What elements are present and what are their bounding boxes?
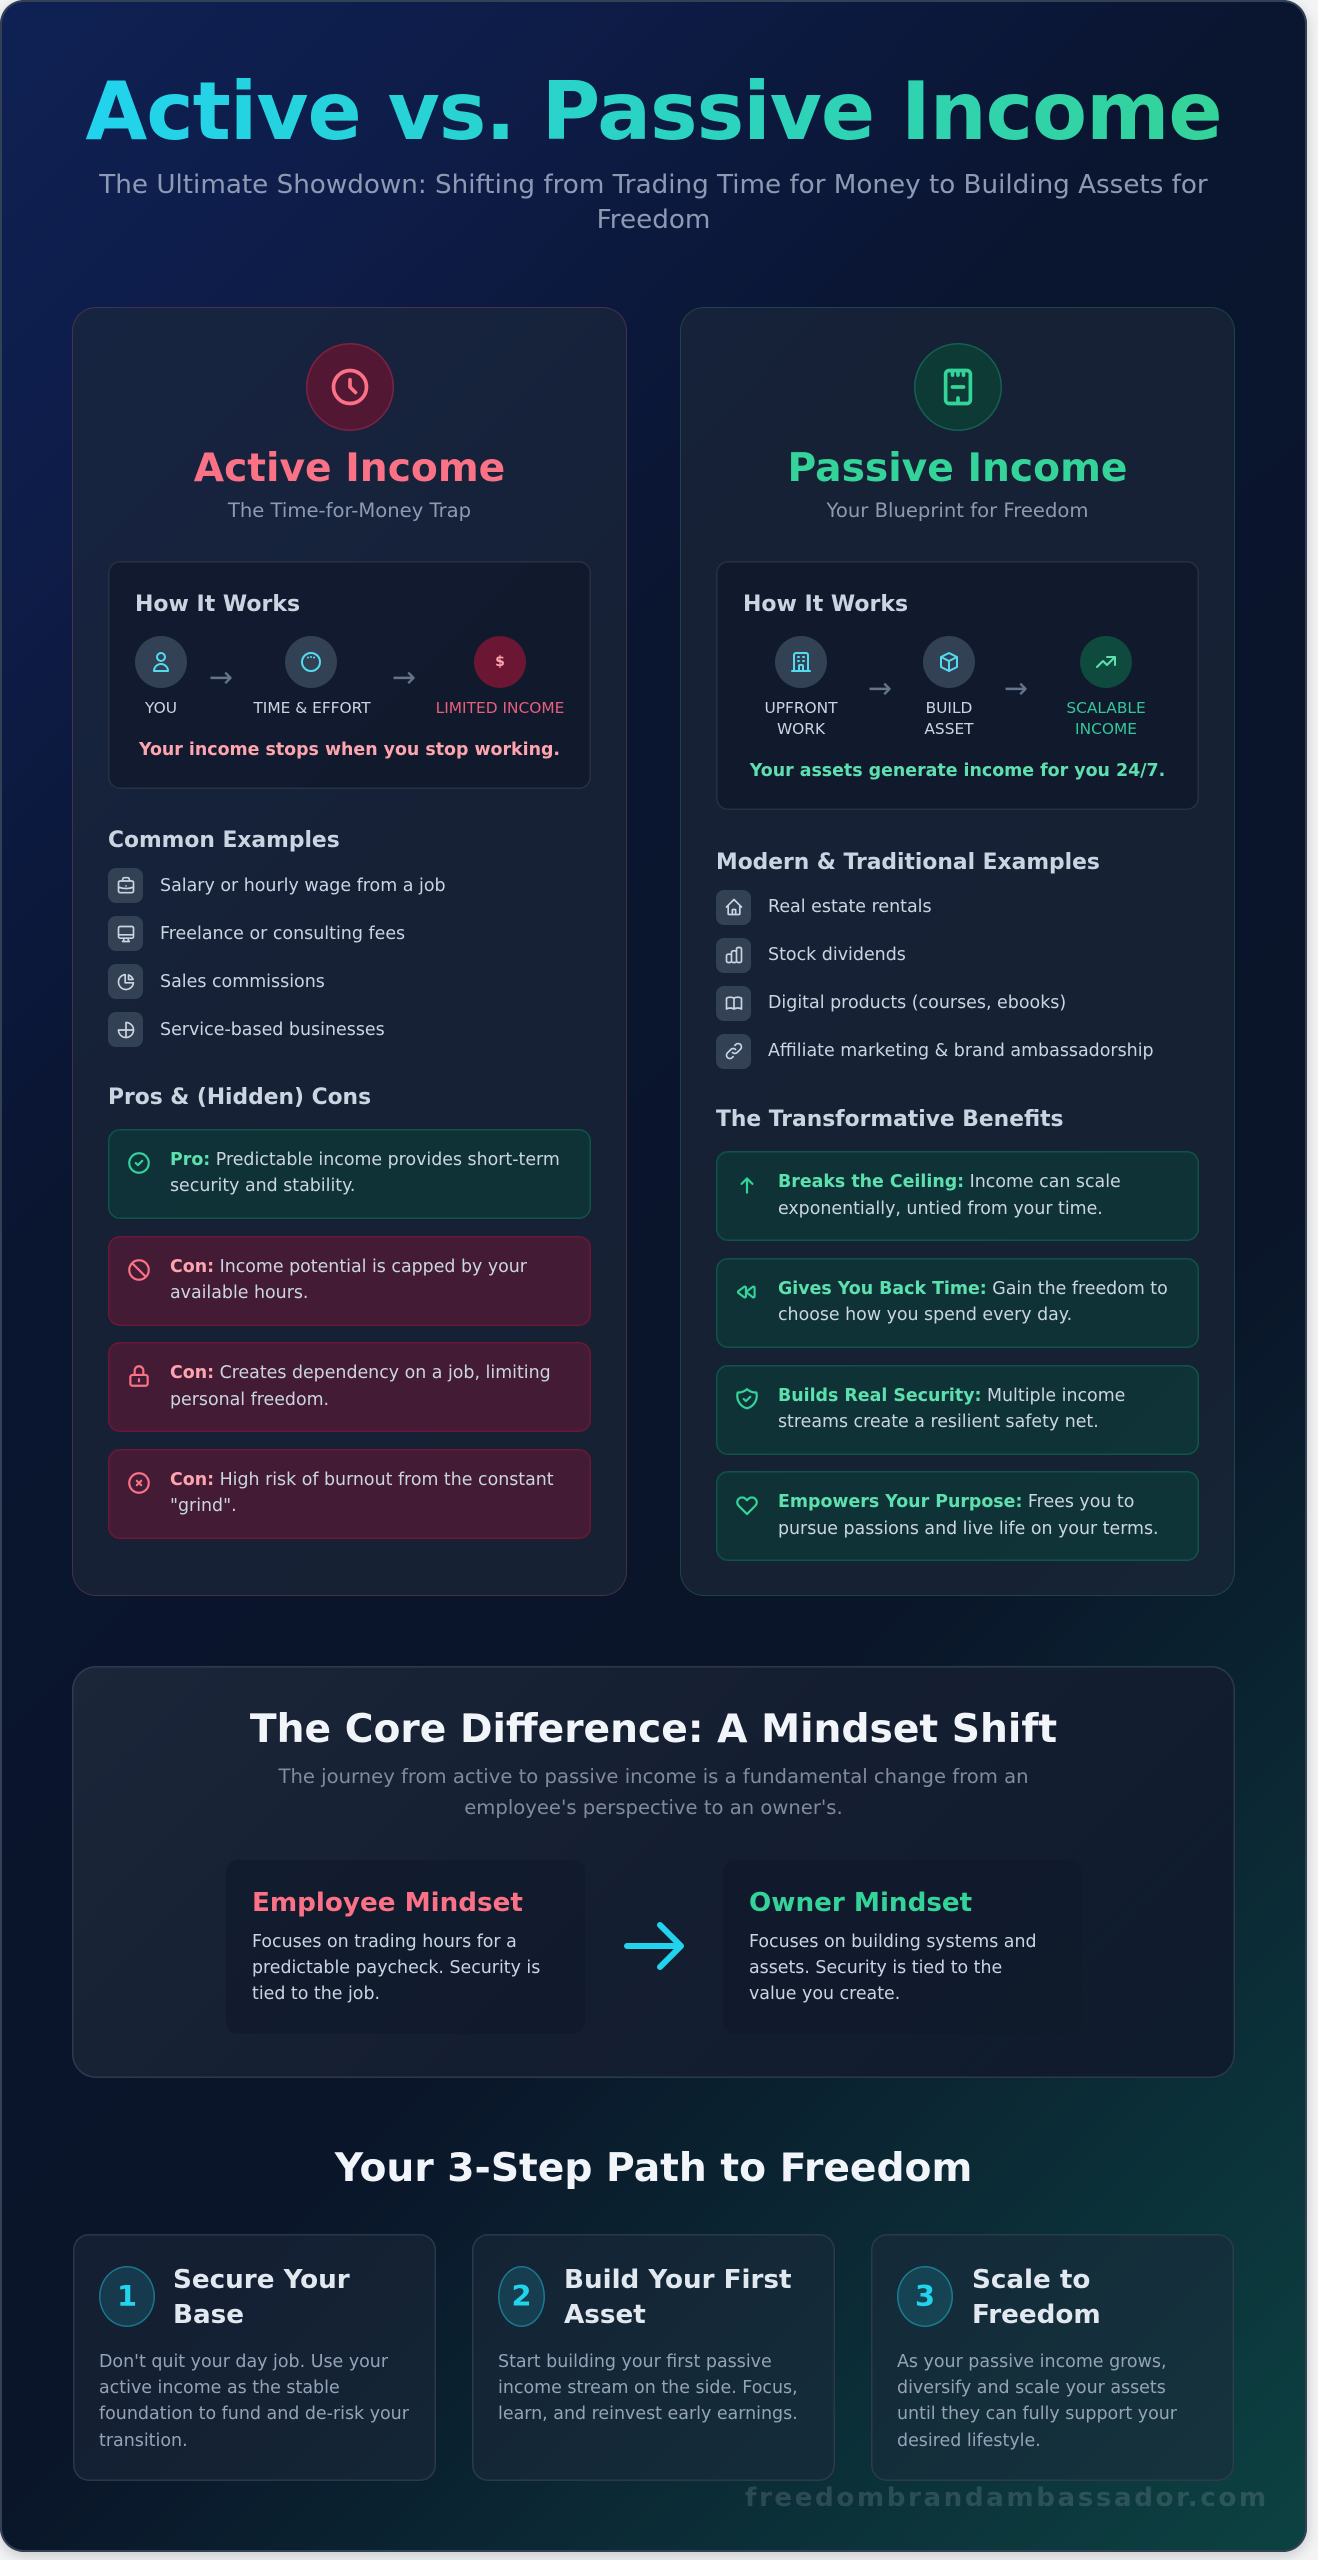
step card 2: Asset [564, 2300, 646, 2330]
step card 3: Freedom [972, 2300, 1101, 2330]
pro: predictable [108, 1129, 591, 1219]
label: scalable income [1066, 698, 1146, 738]
mindset description [278, 1765, 1028, 1819]
icon: clock [306, 343, 394, 431]
step card 3 [871, 2234, 1234, 2481]
step card 1: Don't quit your day job. Use your [99, 2352, 388, 2372]
benefit: ceiling: Breaks the Ceiling: Income can scale [778, 1172, 1121, 1192]
benefit: time: choose how you spend every day. [778, 1305, 1072, 1325]
label: time and effort: TIME & EFFORT [253, 698, 371, 716]
example: service business: Service-based businesses [160, 1020, 385, 1040]
subtitle: The Ultimate Showdown: Shifting from Trading Time for Money to Building Assets for [99, 170, 1208, 200]
takeaway: Your assets generate income for you 24/7. [750, 760, 1165, 780]
example: dividends: Stock dividends [768, 945, 906, 965]
step card 1: Base [173, 2300, 244, 2330]
label: upfront work [764, 698, 838, 738]
step: limited income: $ [495, 654, 505, 670]
mindset description: The journey from active to passive income is a fundamental change from an [278, 1765, 1028, 1788]
benefit: ceiling: exponentially, untied from your time. [778, 1199, 1103, 1219]
how it works heading: How It Works [743, 592, 908, 616]
step card 2: learn, and reinvest early earnings. [498, 2404, 798, 2424]
step: upfront work [775, 636, 827, 688]
step card 3: desired lifestyle. [897, 2431, 1041, 2451]
label: build asset: ASSET [924, 720, 974, 738]
how it works heading: How It Works [135, 592, 300, 616]
benefit: time: Gives You Back Time: Gain the freedom to [778, 1279, 1168, 1299]
employee mindset box: tied to the job. [252, 1984, 380, 2004]
passive income heading: Passive Income [787, 446, 1128, 491]
example: affiliate marketing [716, 1034, 1154, 1069]
con: burnout: "grind". [170, 1496, 237, 1516]
con: dependency: Con: Creates dependency on a job, limiting [170, 1363, 551, 1383]
arrow: shift [624, 1922, 684, 1970]
example: commissions: Sales commissions [160, 972, 325, 992]
owner mindset box: Owner Mindset [749, 1888, 972, 1918]
panel: active income [72, 307, 627, 1596]
mindset heading: The Core Difference: A Mindset Shift [250, 1707, 1057, 1752]
step card 1: active income as the stable [99, 2378, 340, 2398]
panel: passive income [680, 307, 1235, 1596]
active income heading: Active Income [194, 446, 505, 491]
label: limited income: LIMITED INCOME [436, 698, 564, 716]
benefit: purpose: Empowers Your Purpose: Frees you to [778, 1492, 1134, 1512]
example: service business [108, 1012, 385, 1047]
benefit: purpose [716, 1471, 1199, 1561]
step card 2: Build Your First [564, 2264, 792, 2294]
title: Active vs. Passive Income [85, 65, 1222, 158]
owner mindset box: Focuses on building systems and [749, 1932, 1037, 1952]
employee mindset box: predictable paycheck. Security is [252, 1958, 540, 1978]
employee mindset box: Focuses on trading hours for a [252, 1932, 517, 1952]
arrow: → [392, 660, 416, 694]
step card 3: until they can fully support your [897, 2404, 1177, 2424]
benefits heading: The Transformative Benefits [716, 1107, 1064, 1132]
con: capped: Con: Income potential is capped by your [170, 1257, 527, 1277]
owner mindset box [723, 1860, 1082, 2034]
example: real estate: Real estate rentals [768, 897, 932, 917]
active income tagline: The Time-for-Money Trap [228, 498, 471, 522]
example: real estate [716, 890, 932, 925]
subtitle [99, 170, 1208, 235]
arrow: → [868, 671, 892, 705]
step card 2 [472, 2234, 835, 2481]
label: upfront work: WORK [777, 720, 825, 738]
subtitle: Freedom [597, 205, 710, 235]
step card 2: 2 [511, 2279, 532, 2313]
benefit: time [716, 1258, 1199, 1348]
step card 3: 3 [915, 2279, 935, 2313]
employee mindset box: Employee Mindset [252, 1888, 523, 1918]
con: dependency: personal freedom. [170, 1390, 329, 1410]
example: salary: Salary or hourly wage from a job [160, 876, 446, 896]
label: upfront work: UPFRONT [764, 698, 838, 716]
benefit: purpose: pursue passions and live life on your terms. [778, 1519, 1159, 1539]
benefit: security [716, 1365, 1199, 1455]
pros and cons heading: Pros & (Hidden) Cons [108, 1084, 371, 1110]
example: freelance: Freelance or consulting fees [160, 924, 405, 944]
example: commissions [108, 964, 325, 999]
step card 1: transition. [99, 2431, 188, 2451]
benefit: ceiling [716, 1151, 1199, 1241]
watermark: freedombrandambassador.com [745, 2483, 1269, 2513]
con: burnout [108, 1449, 591, 1539]
icon: asset [914, 343, 1002, 431]
example: freelance [108, 916, 405, 951]
passive income tagline: Your Blueprint for Freedom [827, 498, 1088, 522]
example: salary [108, 868, 446, 903]
mindset description: employee's perspective to an owner's. [464, 1796, 843, 1819]
modern and traditional examples heading: Modern & Traditional Examples [716, 850, 1100, 875]
step card 1: 1 [117, 2279, 137, 2313]
step card 1: foundation to fund and de-risk your [99, 2404, 409, 2424]
arrow: → [1004, 671, 1028, 705]
con: capped: available hours. [170, 1283, 308, 1303]
label: build asset: BUILD [926, 698, 972, 716]
con: dependency [108, 1342, 591, 1432]
step: time and effort [285, 636, 337, 688]
example: dividends [716, 938, 906, 973]
example: affiliate marketing: Affiliate marketing & brand ambassadorship [768, 1041, 1154, 1061]
owner mindset box: assets. Security is tied to the [749, 1958, 1002, 1978]
pro: predictable: security and stability. [170, 1176, 355, 1196]
label: you: YOU [145, 698, 177, 716]
step: scalable income [1080, 636, 1132, 688]
step card 2: Start building your first passive [498, 2352, 772, 2372]
step card 1 [73, 2234, 436, 2481]
steps heading: Your 3-Step Path to Freedom [335, 2146, 972, 2190]
benefit: security: streams create a resilient safety net. [778, 1412, 1099, 1432]
label: scalable income: INCOME [1075, 720, 1137, 738]
pro: predictable: Pro: Predictable income provides short-term [170, 1150, 560, 1170]
step card 1: Secure Your [173, 2264, 350, 2294]
panel: mindset shift [72, 1666, 1235, 2078]
example: digital products: Digital products (courses, ebooks) [768, 993, 1066, 1013]
label: build asset [924, 698, 974, 738]
step card 3: Scale to [972, 2264, 1090, 2294]
step: build asset [923, 636, 975, 688]
employee mindset box [226, 1860, 585, 2034]
common examples heading: Common Examples [108, 828, 340, 852]
step card 3: diversify and scale your assets [897, 2378, 1166, 2398]
con: capped [108, 1236, 591, 1326]
step card 2: income stream on the side. Focus, [498, 2378, 798, 2398]
label: scalable income: SCALABLE [1066, 698, 1146, 716]
benefit: security: Builds Real Security: Multiple income [778, 1386, 1125, 1406]
arrow: → [209, 660, 233, 694]
step card 3: As your passive income grows, [897, 2352, 1166, 2372]
takeaway: Your income stops when you stop working. [139, 740, 560, 760]
example: digital products [716, 986, 1066, 1021]
step: limited income [474, 636, 526, 688]
how it works: active [108, 561, 591, 789]
owner mindset box: value you create. [749, 1984, 900, 2004]
con: burnout: Con: High risk of burnout from the constant [170, 1470, 554, 1490]
step: you [135, 636, 187, 688]
how it works: passive [716, 561, 1199, 810]
